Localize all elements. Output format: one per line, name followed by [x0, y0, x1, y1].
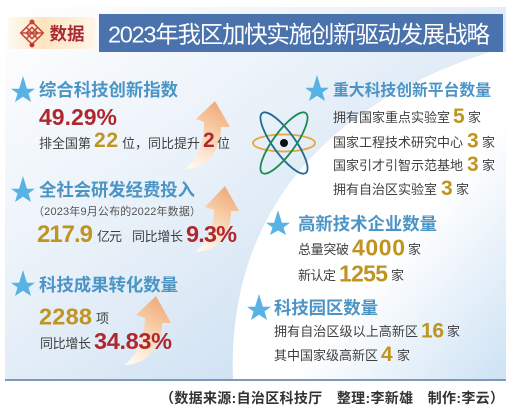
line 3: 国家引才引智示范基地	[333, 158, 463, 173]
detail line: 位，同比提升	[122, 136, 200, 151]
line 1	[298, 234, 421, 260]
heading: 科技成果转化数量	[39, 275, 178, 295]
icon: star 4	[305, 75, 329, 101]
line 1: 家	[447, 324, 460, 339]
heading: 高新技术企业数量	[298, 214, 437, 234]
line 1: 拥有自治区级以上高新区	[274, 324, 418, 339]
panel: high-tech enterprises	[266, 210, 437, 286]
line 1: 家	[408, 242, 421, 257]
growth: 同比增长	[40, 336, 91, 351]
panel: composite science index	[11, 76, 230, 152]
arrow: middle left	[195, 186, 239, 252]
line 1: 拥有国家重点实验室	[333, 110, 450, 125]
values	[37, 221, 237, 248]
count: 项	[96, 311, 109, 326]
line 4	[333, 177, 469, 200]
line 2	[298, 260, 404, 286]
detail line: 排全国第	[39, 136, 91, 151]
line 2: 家	[397, 348, 410, 363]
line 2: 4	[381, 343, 393, 366]
value: 49.29%	[39, 104, 117, 130]
line 2: 3	[467, 130, 479, 152]
line 1	[333, 105, 481, 128]
line 1	[274, 320, 460, 342]
source credit: （数据来源:自治区科技厅 整理:李新雄 制作:李云）	[160, 390, 504, 406]
line 4: 3	[441, 177, 453, 200]
line 1: 16	[421, 320, 444, 342]
values: 9.3%	[186, 221, 237, 247]
detail line: 2	[203, 129, 215, 152]
arrow: bottom left	[124, 296, 171, 365]
line 3: 家	[482, 158, 495, 173]
logo badge	[8, 17, 95, 49]
values: 同比增长	[132, 229, 183, 244]
heading: 综合科技创新指数	[39, 80, 179, 100]
line 1: 5	[453, 105, 465, 128]
heading: 全社会研发经费投入	[39, 180, 195, 200]
heading: 科技园区数量	[274, 298, 378, 318]
line 1: 总量突破	[298, 242, 349, 257]
values: 亿元	[97, 229, 122, 244]
line 2	[333, 130, 495, 152]
line 1: 家	[468, 110, 481, 125]
panel: tech transfer	[11, 270, 178, 354]
line 2: 新认定	[298, 268, 336, 283]
panel: R&D funding	[11, 176, 237, 248]
icon: star 2	[11, 176, 35, 202]
line 2: 家	[391, 268, 404, 283]
growth: 34.83%	[94, 328, 172, 354]
detail line	[39, 129, 230, 152]
title bar	[99, 14, 503, 52]
title bar: 2023年我区加快实施创新驱动发展战略	[108, 22, 490, 48]
badge text: 数据	[50, 24, 84, 44]
count: 2288	[39, 304, 92, 330]
heading: 重大科技创新平台数量	[333, 80, 491, 100]
line 1: 4000	[352, 234, 405, 260]
line 3: 3	[467, 153, 479, 176]
detail line: 位	[217, 136, 230, 151]
note: （2023年9月公布的2022年数据）	[33, 204, 201, 218]
icon: red knot emblem	[21, 20, 43, 47]
icon: star 3	[11, 270, 35, 296]
line 4: 家	[456, 182, 469, 197]
icon: star 1	[11, 76, 35, 102]
growth	[40, 328, 172, 354]
values: 217.9	[37, 221, 93, 248]
panel: science parks	[247, 294, 460, 366]
icon: star 6	[247, 294, 271, 320]
icon: atom	[253, 107, 315, 179]
detail line: 22	[94, 129, 118, 152]
line 3	[333, 153, 495, 176]
arrow: top left	[185, 101, 230, 169]
line 2: 国家工程技术研究中心	[333, 135, 463, 150]
line 2: 1255	[339, 260, 388, 286]
line 2: 家	[482, 135, 495, 150]
line 2	[274, 343, 410, 366]
line 4: 拥有自治区实验室	[333, 182, 437, 197]
line 2: 其中国家级高新区	[274, 348, 378, 363]
panel: major platforms	[305, 75, 495, 200]
icon: star 5	[266, 210, 290, 235]
